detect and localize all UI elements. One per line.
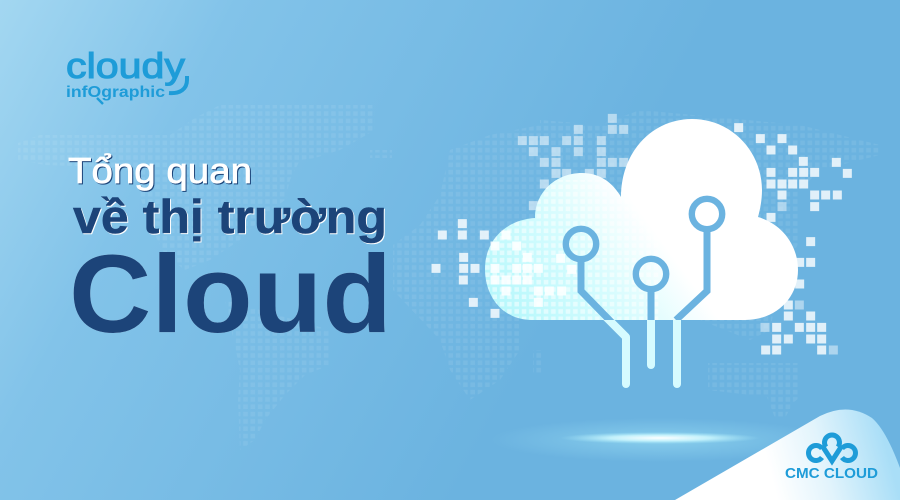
corner logo panel: [675, 409, 900, 500]
cloudy infographic logo: [66, 45, 187, 104]
logo wordmark: CMC CLOUD: [785, 466, 878, 482]
title line 1: Tổng quan: [68, 150, 252, 191]
cloud illustration: [485, 119, 798, 384]
icon: CMC cloud: [809, 435, 856, 461]
CMC Cloud logo: [785, 435, 878, 482]
title line 3: Cloud: [69, 233, 392, 356]
horizon glow: [490, 418, 830, 462]
pixel dots over cloud: [485, 180, 660, 320]
cloudy infographic logo: cloudy: [66, 45, 185, 86]
circuit traces below cloud: [604, 320, 681, 388]
circuit traces inside cloud: [566, 199, 722, 340]
pixel squares over cloud: [495, 235, 572, 302]
cloudy infographic logo: infOgraphic: [66, 84, 165, 101]
title: [68, 150, 392, 356]
cloud shape: [485, 119, 798, 320]
bright pixel squares behind cloud: [436, 118, 847, 350]
title line 2: về thị trường: [73, 190, 387, 243]
world map dot pattern: [64, 105, 878, 450]
